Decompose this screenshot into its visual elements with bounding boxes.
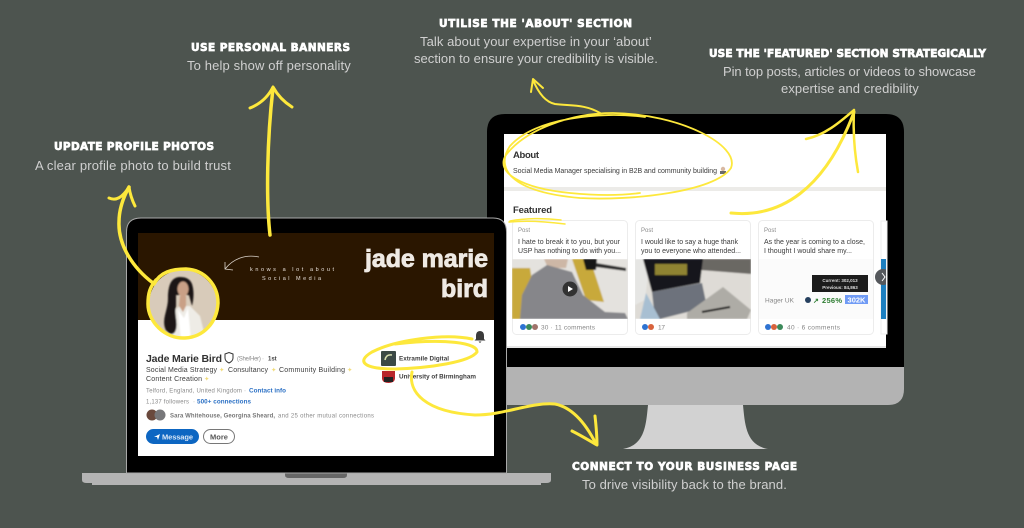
featured card 3: 40 · 6 comments [787, 324, 841, 332]
heading block: update profile photos: UPDATE PROFILE PHOTOS [54, 141, 214, 153]
tooltip: Current: 302,013 [822, 278, 858, 283]
heading block: use personal banners: USE PERSONAL BANNERS [191, 42, 350, 54]
featured card 3: 256% [822, 296, 842, 305]
featured card 3: I thought I would share my... [764, 248, 852, 255]
name and verified badge: Jade Marie Bird [146, 353, 222, 365]
name and verified badge [146, 352, 277, 365]
yellow arrow: featured section [731, 110, 858, 214]
laptop [82, 218, 551, 485]
photo: podcaster in grey sweater [512, 259, 628, 319]
company: Extramile Digital: Extramile Digital [399, 356, 449, 362]
featured card 3: 302K [848, 296, 866, 304]
featured heading: Featured [513, 205, 552, 216]
location and followers: Contact info [249, 388, 286, 394]
heading block: utilise the about section [414, 18, 658, 66]
headline: ✦ [271, 366, 277, 374]
featured card 1: Post [518, 228, 530, 234]
yellow ring and arrow: profile photo [109, 187, 218, 338]
yellow scribble and arrow: business page [364, 337, 597, 445]
laptop base [82, 473, 551, 485]
featured card 1: I hate to break it to you, but your [518, 239, 621, 246]
monitor chin [487, 360, 904, 405]
heading block: use personal banners: To help show off personality [187, 58, 351, 73]
yellow scribble and arrow: about section [503, 79, 732, 199]
icon: notification bell [474, 331, 486, 343]
yellow underline: featured heading [509, 219, 565, 224]
featured card 1: 30 · 11 comments [541, 324, 596, 332]
monitor screen [504, 134, 891, 348]
about section text: Social Media Manager specialising in B2B and community building [513, 168, 717, 175]
heading block: use personal banners [187, 42, 351, 73]
monitor stand [623, 405, 768, 449]
heading block: utilise the about section: Talk about your expertise in your ‘about’ [420, 34, 652, 49]
personal banner: bird [441, 275, 488, 303]
hand drawn banner arrow [225, 256, 259, 270]
carousel next button [875, 269, 886, 285]
heading block: connect to your business page: CONNECT TO YOUR BUSINESS PAGE [572, 461, 797, 473]
heading block: use the featured section: Pin top posts, articles or videos to showcase [723, 64, 976, 79]
headline: Content Creation [146, 376, 202, 383]
tooltip: Previous: 84,863 [822, 285, 858, 290]
featured card 3: Hager UK [765, 298, 795, 304]
featured card 2: I would like to say a huge thank [641, 239, 738, 246]
featured card 3: ↗ [813, 298, 819, 305]
location and followers: 1,137 followers [146, 400, 189, 406]
laptop screen [138, 233, 494, 456]
headline: Consultancy [228, 367, 268, 374]
personal banner: Social Media [262, 276, 322, 282]
more button [204, 430, 234, 444]
featured card 2 [635, 220, 751, 334]
desktop monitor [487, 114, 904, 449]
laptop notch [285, 473, 347, 478]
featured card 1: USP has nothing to do with you... [518, 248, 621, 255]
message button [146, 429, 199, 444]
location and followers: · [193, 400, 195, 406]
heading block: use the featured section [709, 48, 986, 96]
personal banner: jade marie [364, 245, 488, 273]
name and verified badge: 1st [268, 356, 277, 362]
heading block: utilise the about section: UTILISE THE 'ABOUT' SECTION [439, 18, 632, 30]
mutual connections: Sara Whitehouse, Georgina Sheard, [170, 414, 275, 420]
featured card 3: As the year is coming to a close, [764, 239, 865, 246]
company: University of Birmingham: University of Birmingham [399, 374, 476, 380]
heading block: use the featured section: USE THE 'FEATURED' SECTION STRATEGICALLY [709, 48, 986, 60]
heading block: update profile photos: A clear profile photo to build trust [35, 158, 231, 173]
featured card 2: Post [641, 228, 653, 234]
personal banner: knows a lot about [250, 267, 334, 273]
location and followers: Telford, England, United Kingdom · [146, 388, 246, 394]
headline: Social Media Strategy [146, 367, 218, 374]
yellow arrow: banner [250, 87, 292, 235]
heading block: connect to your business page: To drive visibility back to the brand. [582, 477, 787, 492]
location and followers: 500+ connections [197, 398, 251, 406]
company: University of Birmingham [382, 371, 476, 383]
featured card 1 [512, 220, 628, 334]
featured card 2: 17 [658, 324, 665, 332]
heading block: update profile photos [35, 141, 231, 173]
featured card 2: you to everyone who attended... [641, 248, 741, 255]
headline [146, 366, 353, 383]
heading block: utilise the about section: section to ensure your credibility is visible. [414, 51, 658, 66]
heading block: connect to your business page [572, 461, 797, 492]
headline: ✦ [219, 366, 225, 374]
headline: Community Building [279, 367, 345, 374]
featured card 3: Post [764, 228, 776, 234]
company: Extramile Digital [381, 351, 449, 366]
featured card 4 sliver [881, 221, 887, 334]
headline: ✦ [204, 375, 210, 383]
mutual connections: and 25 other mutual connections [278, 414, 374, 420]
profile photo [150, 270, 216, 336]
monitor bezel [487, 114, 904, 367]
mutual connections [146, 410, 374, 420]
featured card 3 [758, 220, 874, 334]
personal banner [138, 233, 494, 320]
name and verified badge: (She/Her) · [237, 356, 264, 362]
about section text [513, 150, 726, 175]
location and followers [146, 388, 286, 406]
about section text: About [513, 150, 540, 161]
photo: laptop and notebook on desk [635, 259, 751, 319]
laptop bezel [126, 218, 506, 473]
message button: Message [162, 432, 193, 442]
more button: More [210, 432, 228, 442]
heading block: use the featured section: expertise and credibility [781, 81, 919, 96]
tooltip [812, 275, 868, 292]
headline: ✦ [347, 366, 353, 374]
